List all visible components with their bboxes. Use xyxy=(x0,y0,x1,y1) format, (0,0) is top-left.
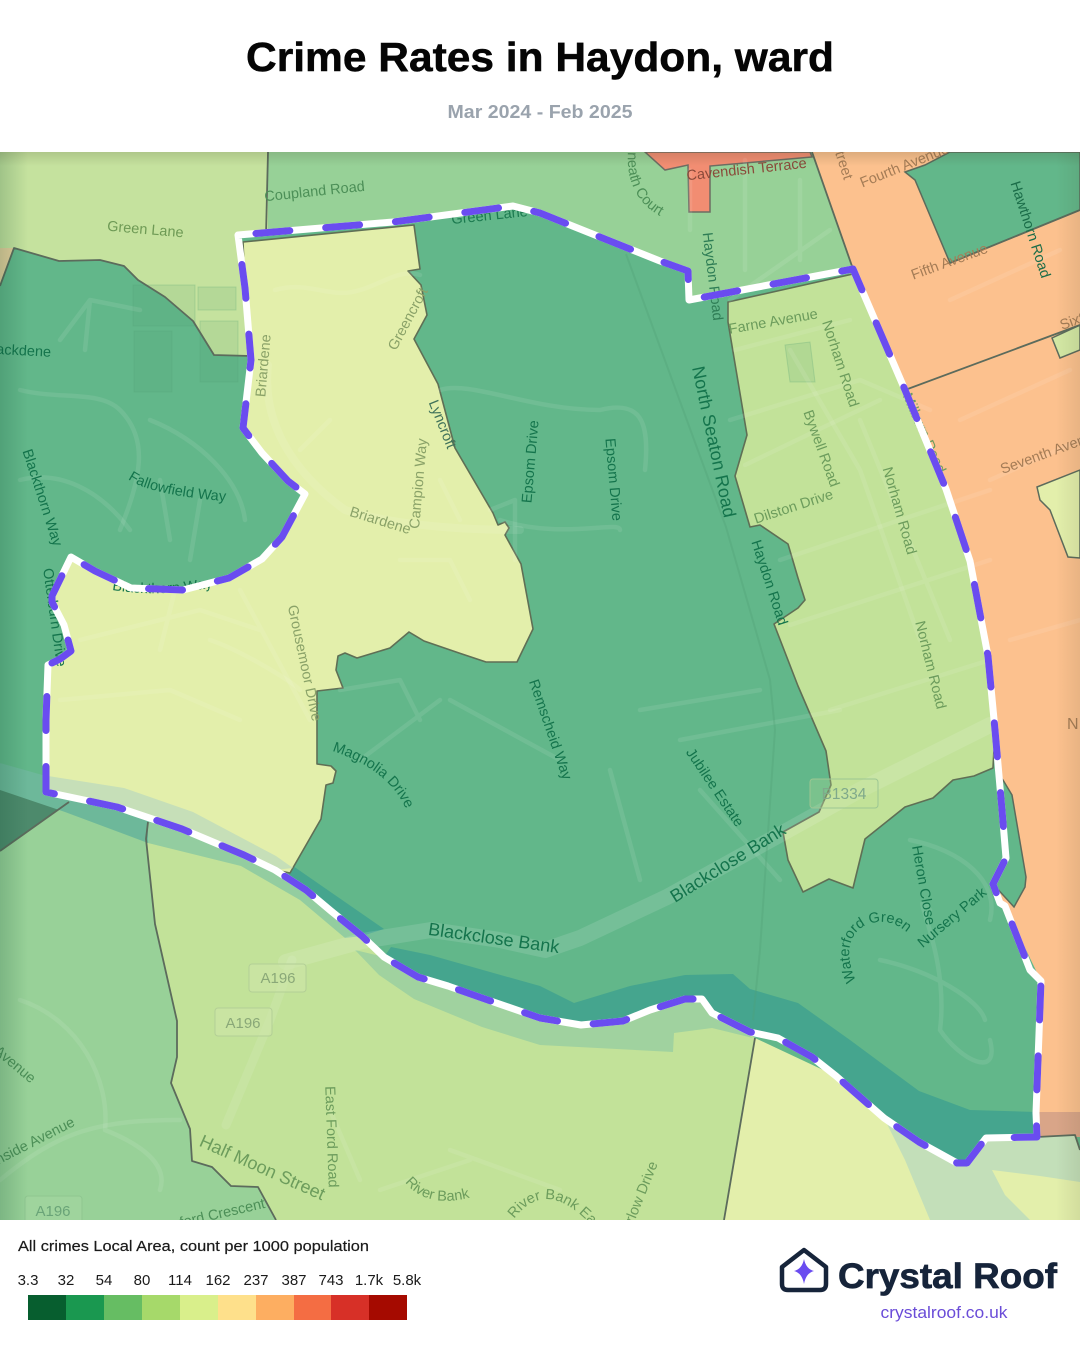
zone: north east dark green xyxy=(905,152,1080,263)
label: Farne Avenue: Farne Avenue xyxy=(728,306,819,338)
legend scale labels: 80 xyxy=(134,1272,150,1289)
legend scale labels: 3.3 xyxy=(18,1272,38,1289)
label: Fallowfield Way: Fallowfield Way xyxy=(128,471,226,504)
label: Street: Street xyxy=(828,140,855,182)
label: North Seaton Road: North Seaton Road xyxy=(688,364,740,519)
shield: A196 left xyxy=(24,1196,82,1220)
ward boundary: white casing xyxy=(46,206,1041,1163)
legend scale labels: 162 xyxy=(205,1272,231,1289)
zone: lower orange strip xyxy=(1036,1112,1080,1137)
label: Green Lane: Green Lane xyxy=(107,219,184,241)
label: Haydon Road north: Haydon Road xyxy=(699,232,725,321)
label: Norham Road 1: Norham Road xyxy=(818,318,861,409)
zone: top middle green xyxy=(238,152,853,300)
panel: legend xyxy=(18,1238,422,1320)
label: Blackclose Bank east: Blackclose Bank xyxy=(667,819,790,906)
shield: A196 xyxy=(249,964,306,992)
label: Lakeford Crescent: Lakeford Crescent xyxy=(148,1196,267,1238)
road shields xyxy=(25,779,878,1224)
label: N: N xyxy=(1067,716,1079,733)
legend scale labels: 54 xyxy=(96,1272,112,1289)
zone: east sliver green xyxy=(996,778,1027,908)
zone: ward pale yellow xyxy=(46,225,533,873)
zone: river west teal band xyxy=(0,763,152,843)
label: Cavendish Terrace: Cavendish Terrace xyxy=(686,156,807,184)
label: Nursery Park: Nursery Park xyxy=(915,884,991,951)
ward boundary: purple dashes xyxy=(46,206,1041,1163)
park rectangles xyxy=(133,285,815,392)
legend scale labels: 387 xyxy=(281,1272,307,1289)
label: Otterburn Drive: Otterburn Drive xyxy=(39,567,69,668)
zone: pale river south east xyxy=(884,1118,1080,1220)
label: East Ford Road: East Ford Road xyxy=(321,1086,341,1188)
map edge shading xyxy=(0,152,1080,1220)
label: Epsom Drive west: Epsom Drive xyxy=(519,420,543,504)
label: Norham Road 3: Norham Road xyxy=(911,619,949,711)
legend colour swatches xyxy=(28,1295,407,1320)
label: Remscheid Way: Remscheid Way xyxy=(525,677,575,783)
shield: A196: A196 xyxy=(260,970,296,987)
label: River Bank East: River Bank East xyxy=(507,1189,595,1220)
shield: B1334 xyxy=(810,779,878,808)
label: Briardene: Briardene xyxy=(348,504,413,538)
shield: A196 left: A196 xyxy=(35,1203,71,1220)
zone: river south pale band xyxy=(355,950,753,1052)
label: Magnolia Drive: Magnolia Drive xyxy=(333,742,412,808)
label: Campion Way: Campion Way xyxy=(407,437,431,529)
zone borders outside the ward xyxy=(0,152,1080,1220)
label: Heath Court: neath Court xyxy=(628,153,664,216)
label: Fifth Avenue: Fifth Avenue xyxy=(909,241,990,284)
label: Grousemoor Drive: Grousemoor Drive xyxy=(284,604,324,723)
zone: pale river over yellow xyxy=(46,776,293,870)
zone: bottom right pale xyxy=(724,1038,1080,1220)
label: Coupland Road: Coupland Road xyxy=(264,179,366,205)
shield: A196 lower xyxy=(215,1008,272,1036)
label: Green Lane north: Green Lane xyxy=(451,204,529,228)
title: Crime Rates in Haydon, ward xyxy=(246,34,834,80)
zone: orange east xyxy=(812,152,1080,1137)
label: Half Moon Street: Half Moon Street xyxy=(197,1131,328,1204)
logo url: crystalroof.co.uk xyxy=(880,1304,1008,1322)
zone: east pale box xyxy=(1037,470,1080,558)
label: Haydon Road south: Haydon Road xyxy=(747,538,790,627)
zone: ward dark green xyxy=(239,236,999,814)
shield: B1334: B1334 xyxy=(822,786,867,803)
label: Marlow Drive: Marlow Drive xyxy=(615,1159,662,1244)
legend scale labels: 5.8k xyxy=(393,1272,422,1289)
label: Dilston Drive: Dilston Drive xyxy=(752,487,835,528)
subtitle: date range: Mar 2024 - Feb 2025 xyxy=(448,102,632,122)
label: Blackthorn Way vertical: Blackthorn Way xyxy=(19,447,65,549)
zone: bottom middle green xyxy=(146,822,755,1220)
label: River Bank: River Bank xyxy=(406,1176,470,1201)
shield: A196 lower: A196 xyxy=(225,1015,261,1032)
panel: Crystal Roof logo xyxy=(782,1250,1057,1322)
label: Greencroft: Greencroft xyxy=(385,285,432,353)
zone: bottom left green xyxy=(0,802,276,1220)
logo wordmark: Crystal Roof xyxy=(838,1257,1057,1296)
zone: ward east light green xyxy=(728,274,995,892)
label: Blackthorn Way curved: Blackthorn Way xyxy=(113,580,210,594)
panel: choropleth map xyxy=(0,152,1080,1220)
zone: river middle band xyxy=(148,822,362,938)
zone: tan corner xyxy=(0,248,13,284)
road network xyxy=(0,160,1080,1190)
label: Heron Close: Heron Close xyxy=(908,844,938,926)
zone: dark triangle xyxy=(0,790,57,850)
label: Fourth Avenue: Fourth Avenue xyxy=(858,141,951,191)
label: Lyncroft: Lyncroft xyxy=(425,398,459,451)
label: Bywell Road: Bywell Road xyxy=(799,408,842,489)
label: Epsom Drive east: Epsom Drive xyxy=(601,438,625,522)
zone: top left light green xyxy=(0,152,268,356)
legend title: All crimes Local Area, count per 1000 population xyxy=(18,1238,369,1255)
zone: east small light green box xyxy=(1052,325,1080,358)
icon: house with star xyxy=(782,1250,826,1290)
legend scale labels: 1.7k xyxy=(355,1272,384,1289)
label: Milburn Road: Milburn Road xyxy=(899,391,949,476)
label: Briardene north: Briardene xyxy=(253,334,275,398)
label: Hawthorn Road: Hawthorn Road xyxy=(1007,179,1053,280)
zone: salmon north xyxy=(645,152,812,212)
label: Jubilee Estate: Jubilee Estate xyxy=(682,746,746,830)
legend scale labels xyxy=(18,1272,422,1289)
zone: ward river teal xyxy=(384,947,1037,1163)
zone: ward river teal upper xyxy=(287,866,384,936)
rail line xyxy=(765,720,776,868)
label: Norham Road 2: Norham Road xyxy=(879,465,919,556)
label: Waterford Green: Waterford Green xyxy=(840,912,910,984)
legend scale labels: 237 xyxy=(243,1272,269,1289)
label: Blackclose Bank west: Blackclose Bank xyxy=(427,919,562,957)
legend scale labels: 114 xyxy=(168,1272,192,1289)
legend scale labels: 32 xyxy=(58,1272,74,1289)
legend scale labels: 743 xyxy=(318,1272,344,1289)
